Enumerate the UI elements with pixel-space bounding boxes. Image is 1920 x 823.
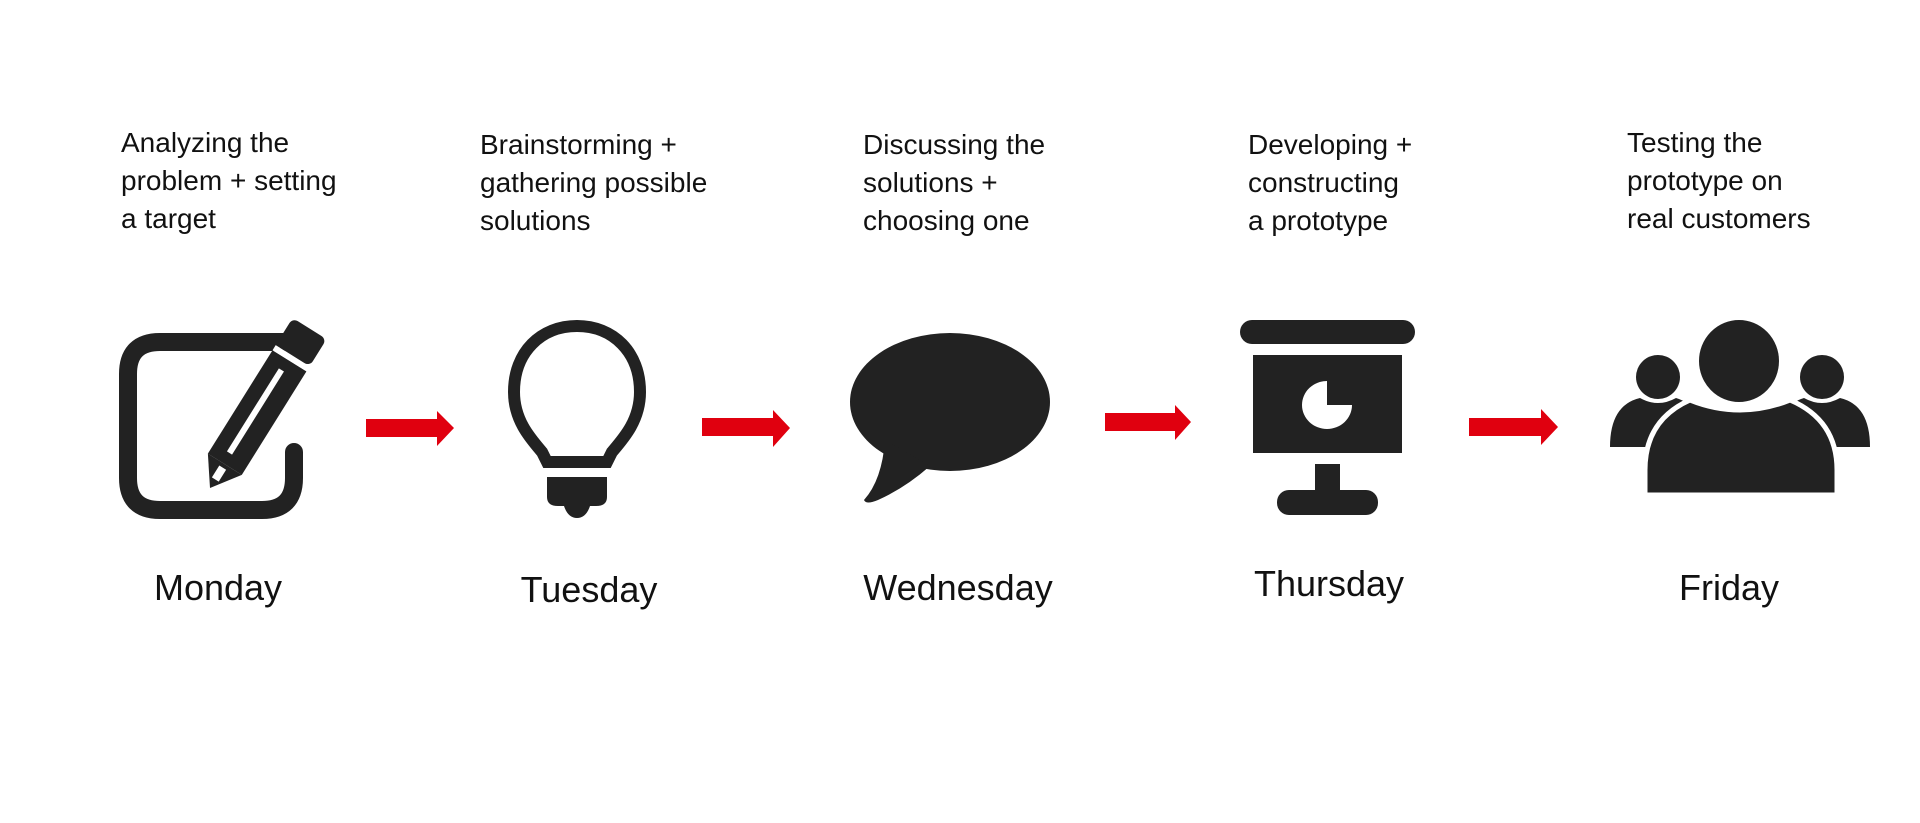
- icon: light bulb: [514, 326, 640, 518]
- label: Wednesday: Wednesday: [863, 567, 1053, 608]
- text: thursday description: [1248, 129, 1412, 236]
- text: thursday description: a prototype: [1248, 205, 1388, 236]
- arrow 3: [1105, 405, 1191, 440]
- text: friday description: prototype on: [1627, 165, 1783, 196]
- label: Monday: Monday: [154, 567, 282, 608]
- text: friday description: real customers: [1627, 203, 1811, 234]
- text: thursday description: Developing +: [1248, 129, 1412, 160]
- text: wednesday description: choosing one: [863, 205, 1030, 236]
- text: monday description: [121, 127, 337, 234]
- text: tuesday description: Brainstorming +: [480, 129, 677, 160]
- label: Friday: Friday: [1679, 567, 1779, 608]
- text: monday description: Analyzing the: [121, 127, 289, 158]
- arrow 4: [1469, 409, 1558, 445]
- text: tuesday description: solutions: [480, 205, 591, 236]
- text: wednesday description: Discussing the: [863, 129, 1045, 160]
- label: Thursday: Thursday: [1254, 563, 1404, 604]
- icon: presentation easel: [1240, 320, 1415, 515]
- text: friday description: Testing the: [1627, 127, 1762, 158]
- text: tuesday description: gathering possible: [480, 167, 707, 198]
- icon: group of people: [1610, 318, 1870, 495]
- arrow 2: [702, 410, 790, 447]
- arrow 1: [366, 411, 454, 446]
- text: wednesday description: solutions +: [863, 167, 998, 198]
- text: monday description: a target: [121, 203, 216, 234]
- icon: notepad with pencil: [128, 318, 327, 510]
- label: Tuesday: Tuesday: [521, 569, 657, 610]
- text: friday description: [1627, 127, 1811, 234]
- text: monday description: problem + setting: [121, 165, 337, 196]
- text: tuesday description: [480, 129, 707, 236]
- text: wednesday description: [863, 129, 1045, 236]
- text: thursday description: constructing: [1248, 167, 1399, 198]
- icon: speech bubble: [850, 333, 1050, 502]
